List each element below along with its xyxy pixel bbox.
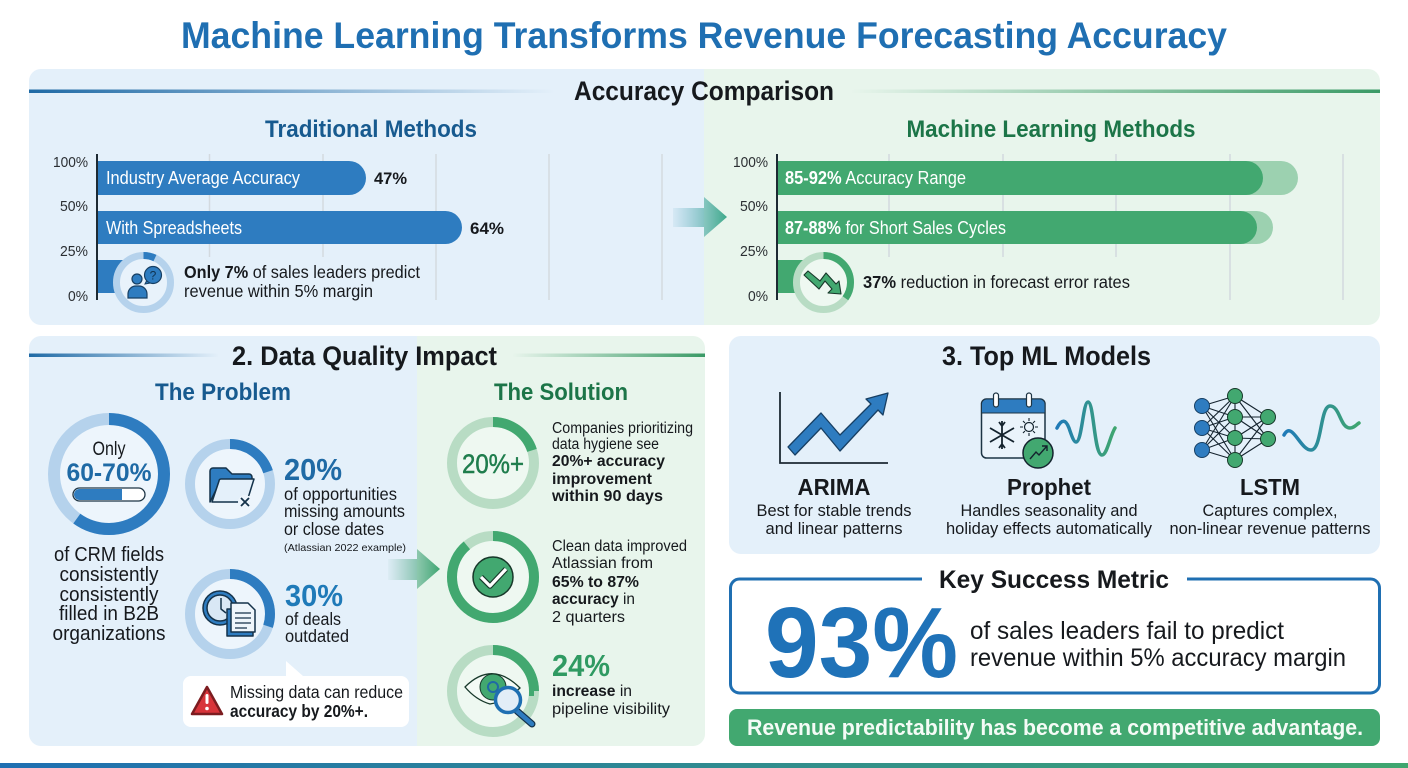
stat: 20 percent plus improvement: improvement bbox=[552, 471, 652, 488]
bar: with spreadsheets: With Spreadsheets bbox=[106, 218, 242, 238]
callout: missing data warning: Missing data can reduce bbox=[230, 682, 403, 702]
chart: traditional methods: 0% bbox=[68, 288, 88, 305]
stat: 20 percent plus improvement: 20%+ bbox=[462, 449, 524, 479]
model: ARIMA: ARIMA bbox=[798, 474, 870, 500]
bar: short sales cycles: 87-88% for Short Sales Cycles bbox=[785, 218, 1006, 238]
stat: 60-70 percent CRM fields bbox=[52, 419, 166, 645]
stat: 60-70 percent CRM fields: of CRM fields bbox=[54, 544, 164, 566]
icon: rising line chart bbox=[780, 392, 888, 463]
bar: with spreadsheets: 64% bbox=[470, 219, 504, 238]
text: only 7 percent: revenue within 5% margin bbox=[184, 281, 373, 301]
model: ARIMA bbox=[756, 392, 912, 538]
model: Prophet bbox=[946, 393, 1152, 538]
stat: 30 percent deals outdated: of deals bbox=[285, 609, 341, 629]
text: only 7 percent: Only 7% of sales leaders predict bbox=[184, 262, 420, 282]
stat: 20 percent plus improvement: within 90 days bbox=[551, 488, 663, 505]
stat: 60-70 percent CRM fields: consistently bbox=[60, 564, 158, 586]
icon: check mark bbox=[473, 557, 513, 597]
bar: industry average: 47% bbox=[374, 169, 407, 188]
stat: 20 percent plus improvement bbox=[452, 420, 693, 505]
stat: 60-70 percent CRM fields: 60-70% bbox=[66, 459, 152, 487]
stat: atlassian 65 to 87 percent: accuracy in bbox=[552, 591, 635, 608]
panel: key success metric bbox=[730, 566, 1380, 699]
icon: calendar with season symbols bbox=[982, 393, 1053, 468]
model: Prophet: Prophet bbox=[1007, 474, 1091, 500]
chart: traditional methods: 50% bbox=[60, 198, 88, 215]
icon: seasonal wave bbox=[1057, 402, 1115, 455]
stat: 20 percent plus improvement: 20%+ accuracy bbox=[552, 453, 665, 470]
heading: the problem: The Problem bbox=[155, 379, 291, 406]
bar: accuracy range bbox=[777, 161, 1298, 195]
stat: 20 percent opportunities missing bbox=[190, 444, 406, 554]
icon: folder with x bbox=[210, 468, 254, 509]
stat: atlassian 65 to 87 percent: Clean data improved bbox=[552, 538, 687, 555]
banner: competitive advantage bbox=[729, 709, 1380, 746]
stat: 24 percent pipeline visibility: increase in bbox=[552, 683, 632, 700]
chart: machine learning methods bbox=[733, 154, 1343, 310]
stat: 60-70 percent CRM fields: organizations bbox=[52, 623, 166, 645]
panel: accuracy comparison bbox=[29, 69, 1380, 325]
stat: 20 percent plus improvement: data hygiene see bbox=[552, 436, 659, 453]
heading: data quality impact: 2. Data Quality Impact bbox=[232, 341, 497, 371]
model: Prophet: holiday effects automatically bbox=[946, 519, 1152, 538]
heading: accuracy comparison: Accuracy Comparison bbox=[574, 76, 834, 106]
stat: 60-70 percent CRM fields: filled in B2B bbox=[59, 603, 159, 625]
stat: 93 percent: 93% bbox=[765, 587, 958, 699]
stat: 24 percent pipeline visibility: 24% bbox=[552, 648, 610, 683]
text: sales leaders fail: of sales leaders fail to predict bbox=[970, 617, 1284, 645]
callout: missing data warning bbox=[183, 661, 409, 727]
text: only 7 percent bbox=[184, 262, 420, 301]
stat: atlassian 65 to 87 percent: Atlassian from bbox=[552, 555, 653, 572]
title: Machine Learning Transforms Revenue Forecasting Accuracy bbox=[181, 15, 1227, 56]
bar: accuracy range: 85-92% Accuracy Range bbox=[785, 168, 966, 188]
stat: 20 percent plus improvement: Companies prioritizing bbox=[552, 420, 693, 437]
panel: data quality impact bbox=[29, 336, 705, 746]
heading: traditional methods: Traditional Methods bbox=[265, 116, 477, 143]
model: Prophet: Handles seasonality and bbox=[960, 501, 1138, 520]
heading: machine learning methods: Machine Learning Methods bbox=[906, 116, 1196, 143]
icon: clock and document bbox=[203, 591, 255, 636]
heading: the solution: The Solution bbox=[494, 379, 628, 406]
text: sales leaders fail bbox=[970, 617, 1346, 672]
heading: key success metric: Key Success Metric bbox=[939, 566, 1169, 594]
bar: with spreadsheets bbox=[97, 211, 504, 244]
stat: 60-70 percent CRM fields: consistently bbox=[60, 584, 158, 606]
bar: industry average: Industry Average Accuracy bbox=[106, 168, 300, 188]
chart: traditional methods bbox=[53, 154, 662, 310]
model: LSTM: Captures complex, bbox=[1202, 501, 1338, 520]
chart: machine learning methods: 100% bbox=[733, 154, 768, 171]
icon: falling trend bbox=[796, 256, 850, 310]
arrow: traditional to machine learning bbox=[673, 197, 727, 237]
stat: 60-70 percent CRM fields: Only bbox=[92, 439, 126, 460]
chart: traditional methods: 25% bbox=[60, 243, 88, 260]
icon: person with question bubble bbox=[116, 256, 170, 310]
chart: machine learning methods: 0% bbox=[748, 288, 768, 305]
stat: 24 percent pipeline visibility bbox=[452, 648, 670, 732]
stat: 30 percent deals outdated: outdated bbox=[285, 626, 349, 646]
stat: atlassian 65 to 87 percent bbox=[452, 536, 687, 626]
text: 37 percent reduction: 37% reduction in forecast error rates bbox=[863, 272, 1130, 292]
icon: person with question bubble: ? bbox=[150, 268, 157, 282]
model: LSTM: LSTM bbox=[1240, 474, 1300, 500]
chart: machine learning methods: 50% bbox=[740, 198, 768, 215]
stat: 20 percent opportunities missing: or close dates bbox=[284, 519, 384, 539]
stat: 20 percent opportunities missing: of opportunities bbox=[284, 484, 397, 504]
callout: missing data warning: accuracy by 20%+. bbox=[230, 701, 368, 721]
model: ARIMA: and linear patterns bbox=[766, 519, 902, 538]
stat: atlassian 65 to 87 percent: 2 quarters bbox=[552, 609, 625, 626]
icon: sequence wave bbox=[1284, 406, 1359, 450]
icon: eye with magnifier bbox=[465, 674, 532, 724]
panel: top ML models bbox=[729, 336, 1380, 554]
stat: 30 percent deals outdated: 30% bbox=[285, 578, 343, 613]
bar: industry average bbox=[97, 161, 407, 195]
chart: traditional methods: 100% bbox=[53, 154, 88, 171]
stat: 20 percent opportunities missing: missing amounts bbox=[284, 501, 405, 521]
arrow: problem to solution bbox=[388, 549, 440, 589]
icon: neural network bbox=[1194, 388, 1276, 468]
model: LSTM: non-linear revenue patterns bbox=[1170, 519, 1370, 538]
stat: 30 percent deals outdated bbox=[190, 574, 349, 654]
bar: short sales cycles bbox=[777, 211, 1273, 244]
model: ARIMA: Best for stable trends bbox=[756, 501, 912, 520]
heading: top ML models: 3. Top ML Models bbox=[942, 341, 1151, 371]
text: sales leaders fail: revenue within 5% accuracy margin bbox=[970, 644, 1346, 672]
footer gradient bar bbox=[0, 763, 1408, 768]
chart: machine learning methods: 25% bbox=[740, 243, 768, 260]
model: LSTM bbox=[1170, 388, 1370, 538]
stat: 20 percent opportunities missing: 20% bbox=[284, 452, 342, 487]
icon: warning triangle bbox=[192, 687, 222, 714]
stat: 24 percent pipeline visibility: pipeline visibility bbox=[552, 701, 670, 718]
banner: competitive advantage: Revenue predictability has become a competitive advantage. bbox=[747, 715, 1363, 740]
stat: 20 percent opportunities missing: (Atlassian 2022 example) bbox=[284, 542, 406, 554]
stat: atlassian 65 to 87 percent: 65% to 87% bbox=[552, 574, 639, 591]
